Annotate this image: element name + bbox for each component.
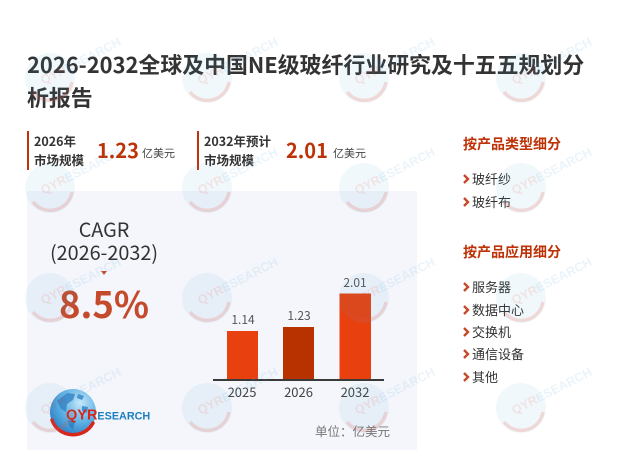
watermark layer: QYRESEARCH: [195, 365, 280, 417]
item: 数据中心: [472, 300, 524, 319]
watermark layer: QYRESEARCH: [352, 365, 437, 417]
watermark layer: QYRESEARCH: [352, 35, 437, 87]
watermark layer: QYRESEARCH: [38, 255, 123, 307]
axis labels: [228, 382, 369, 401]
watermark layer: QYRESEARCH: [38, 365, 123, 417]
chart panel background: [27, 191, 417, 450]
stat: 2026 market size: 市场规模: [34, 150, 84, 169]
watermark layer: QYRESEARCH: [195, 145, 280, 197]
logo: QYResearch: [50, 389, 150, 436]
list: product types: [463, 169, 511, 211]
watermark layer: QYRESEARCH: [352, 145, 437, 197]
stat: 2026 market size: 1.23: [97, 135, 139, 164]
red swoosh: [52, 420, 93, 435]
CAGR value: 8.5%: [59, 276, 149, 329]
title: 析报告: [27, 82, 93, 113]
item: 玻纤布: [472, 192, 511, 211]
watermark layer: QYRESEARCH: [509, 35, 594, 87]
item: 玻纤纱: [472, 169, 511, 188]
bar 2026: [283, 307, 314, 379]
axis line: [213, 379, 384, 381]
CAGR label: CAGR: [79, 214, 129, 243]
stat: 2026 market size: 亿美元: [142, 145, 175, 161]
stat: 2032 forecast market size: 2032年预计: [204, 131, 271, 150]
item: 交换机: [472, 322, 511, 341]
bar 2025: 1.14: [231, 311, 255, 328]
stat: 2026 market size: 2026年: [34, 131, 76, 150]
heading: by product type: 按产品类型细分: [463, 134, 561, 154]
logo wordmark: QYRESEARCH: [66, 408, 150, 424]
axis labels: 2032: [341, 382, 369, 401]
title: [27, 49, 584, 113]
item: 通信设备: [472, 344, 524, 363]
item: 其他: [472, 367, 498, 386]
unit note: 单位：亿美元: [315, 421, 390, 440]
title: 2026-2032全球及中国NE级玻纤行业研究及十五五规划分: [27, 49, 584, 80]
watermark layer: QYRESEARCH: [38, 35, 123, 87]
stat: 2032 forecast market size: [197, 131, 374, 170]
stat: 2032 forecast market size: 2.01: [286, 135, 328, 164]
watermark layer: QYRESEARCH: [509, 145, 594, 197]
axis labels: 2026: [284, 382, 313, 401]
bar chart: [213, 274, 384, 401]
icon: small down triangle: [101, 271, 107, 275]
stat: 2032 forecast market size: 市场规模: [204, 150, 254, 169]
continents: [57, 393, 88, 430]
stat: 2032 forecast market size: 亿美元: [333, 145, 366, 161]
item: 服务器: [472, 277, 511, 296]
watermark layer: QYRESEARCH: [38, 145, 123, 197]
bar 2032: [340, 274, 371, 379]
CAGR label: [50, 214, 158, 266]
bar 2025: [227, 311, 258, 379]
bar 2032: 2.01: [343, 274, 367, 291]
watermark layer: QYRESEARCH: [195, 35, 280, 87]
bar 2026: 1.23: [287, 307, 311, 324]
stat: 2026 market size: [27, 131, 189, 170]
watermark layer: QYRESEARCH: [352, 255, 437, 307]
heading: by application: 按产品应用细分: [463, 242, 561, 262]
globe: [50, 389, 96, 435]
watermark layer: QYRESEARCH: [509, 255, 594, 307]
watermark layer: QYRESEARCH: [509, 365, 594, 417]
watermark layer: QYRESEARCH: [195, 255, 280, 307]
CAGR label: (2026-2032): [50, 237, 158, 266]
axis labels: 2025: [228, 382, 256, 401]
